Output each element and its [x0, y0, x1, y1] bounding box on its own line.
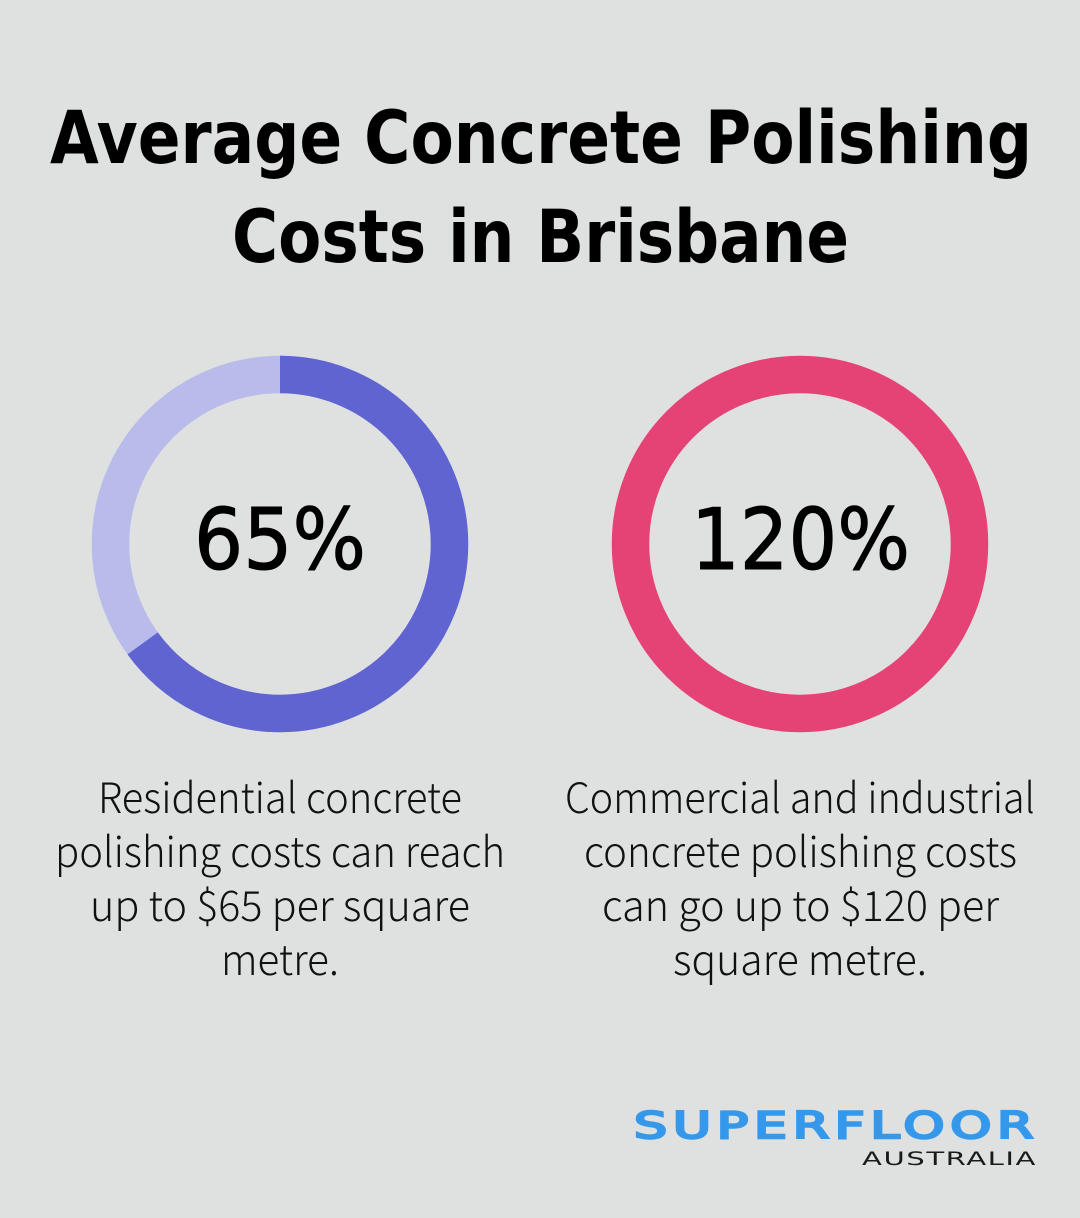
description: commercial: concrete polishing costs: [584, 819, 1017, 880]
description: residential: metre.: [221, 927, 339, 988]
logo: [634, 1104, 1039, 1170]
description: commercial: square metre.: [673, 927, 927, 988]
panel: commercial: [565, 374, 1035, 988]
title: [50, 96, 1032, 280]
description: commercial: can go up to $120 per: [602, 873, 1000, 934]
description: residential: Residential concrete: [98, 765, 462, 826]
donut chart: 65%: [110, 374, 450, 714]
value: 65%: 65%: [194, 491, 366, 590]
logo: AUSTRALIA: [862, 1148, 1037, 1170]
title: Costs in Brisbane: [232, 195, 849, 280]
description: commercial: [565, 765, 1035, 988]
panel: residential: [55, 374, 505, 988]
description: commercial: Commercial and industrial: [565, 765, 1035, 826]
description: residential: up to $65 per square: [90, 873, 470, 934]
value: 120%: 120%: [691, 491, 910, 590]
donut chart: 120%: [630, 374, 970, 714]
description: residential: polishing costs can reach: [55, 819, 505, 880]
logo: SUPERFLOOR: [634, 1104, 1039, 1147]
description: residential: [55, 765, 505, 988]
